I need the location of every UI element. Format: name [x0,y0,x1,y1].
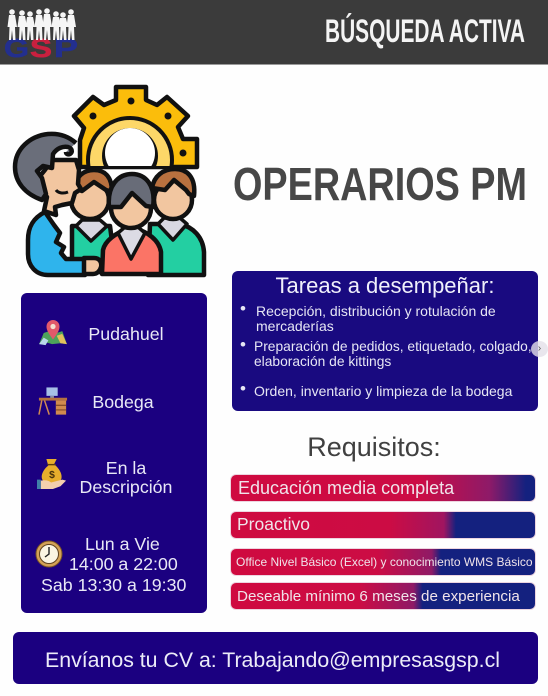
location text: Pudahuel [88,324,164,344]
icon: map pin [39,320,67,346]
icon: desk [38,387,68,415]
carousel arrow [531,341,548,357]
right person [15,134,204,275]
gear [72,84,200,170]
requirement: office: Office Nivel Básico (Excel) y conocimiento WMS Básico [236,555,533,569]
requirement: education [230,474,536,502]
logo: GSP [4,8,78,60]
task 2 [240,335,532,369]
task 2: elaboración de kittings [254,354,391,368]
schedule text: Lun a Vie [85,534,160,554]
schedule text [41,534,186,595]
requirement: experience: Deseable mínimo 6 meses de experiencia [237,588,520,605]
icon: team and gear [12,84,206,278]
icon: clock [36,540,62,568]
icon: money bag: $ [49,470,55,481]
front man body [28,212,85,275]
left small person [72,226,116,272]
requirement: office [230,548,536,576]
tasks heading: Tareas a desempeñar: [276,273,494,298]
schedule text: Sab 13:30 a 19:30 [41,575,186,595]
task 1: Recepción, distribución y rotulación de [256,303,496,319]
panel: tasks [232,271,538,411]
task 1 [240,299,496,334]
front man face [38,160,81,215]
task 3: Orden, inventario y limpieza de la bodega [254,383,512,399]
requirements heading: Requisitos: [307,432,441,462]
header bar [0,0,548,65]
requirement: proactive [230,511,536,539]
panel: job details [21,293,207,613]
schedule text: 14:00 a 22:00 [69,554,178,574]
icon: money bag [37,459,66,489]
middle person [102,228,161,274]
task 3: • [240,379,246,398]
footer call to action [13,632,538,684]
carousel arrow: › [538,343,541,354]
requirement: experience [230,582,536,610]
salary text [80,458,172,497]
salary text: En la [106,458,146,478]
task 1: mercaderías [256,318,334,334]
task 2: Preparación de pedidos, etiquetado, colgado, [254,339,532,354]
task 1: • [240,299,246,318]
requirement: education: Educación media completa [238,478,454,498]
workplace text: Bodega [92,392,154,412]
salary text: Descripción [80,477,172,497]
front man hair [15,134,76,200]
footer call to action: Envíanos tu CV a: Trabajando@empresasgsp.cl [45,648,500,672]
task 2: • [240,335,246,354]
requirement: proactive: Proactivo [237,514,310,534]
